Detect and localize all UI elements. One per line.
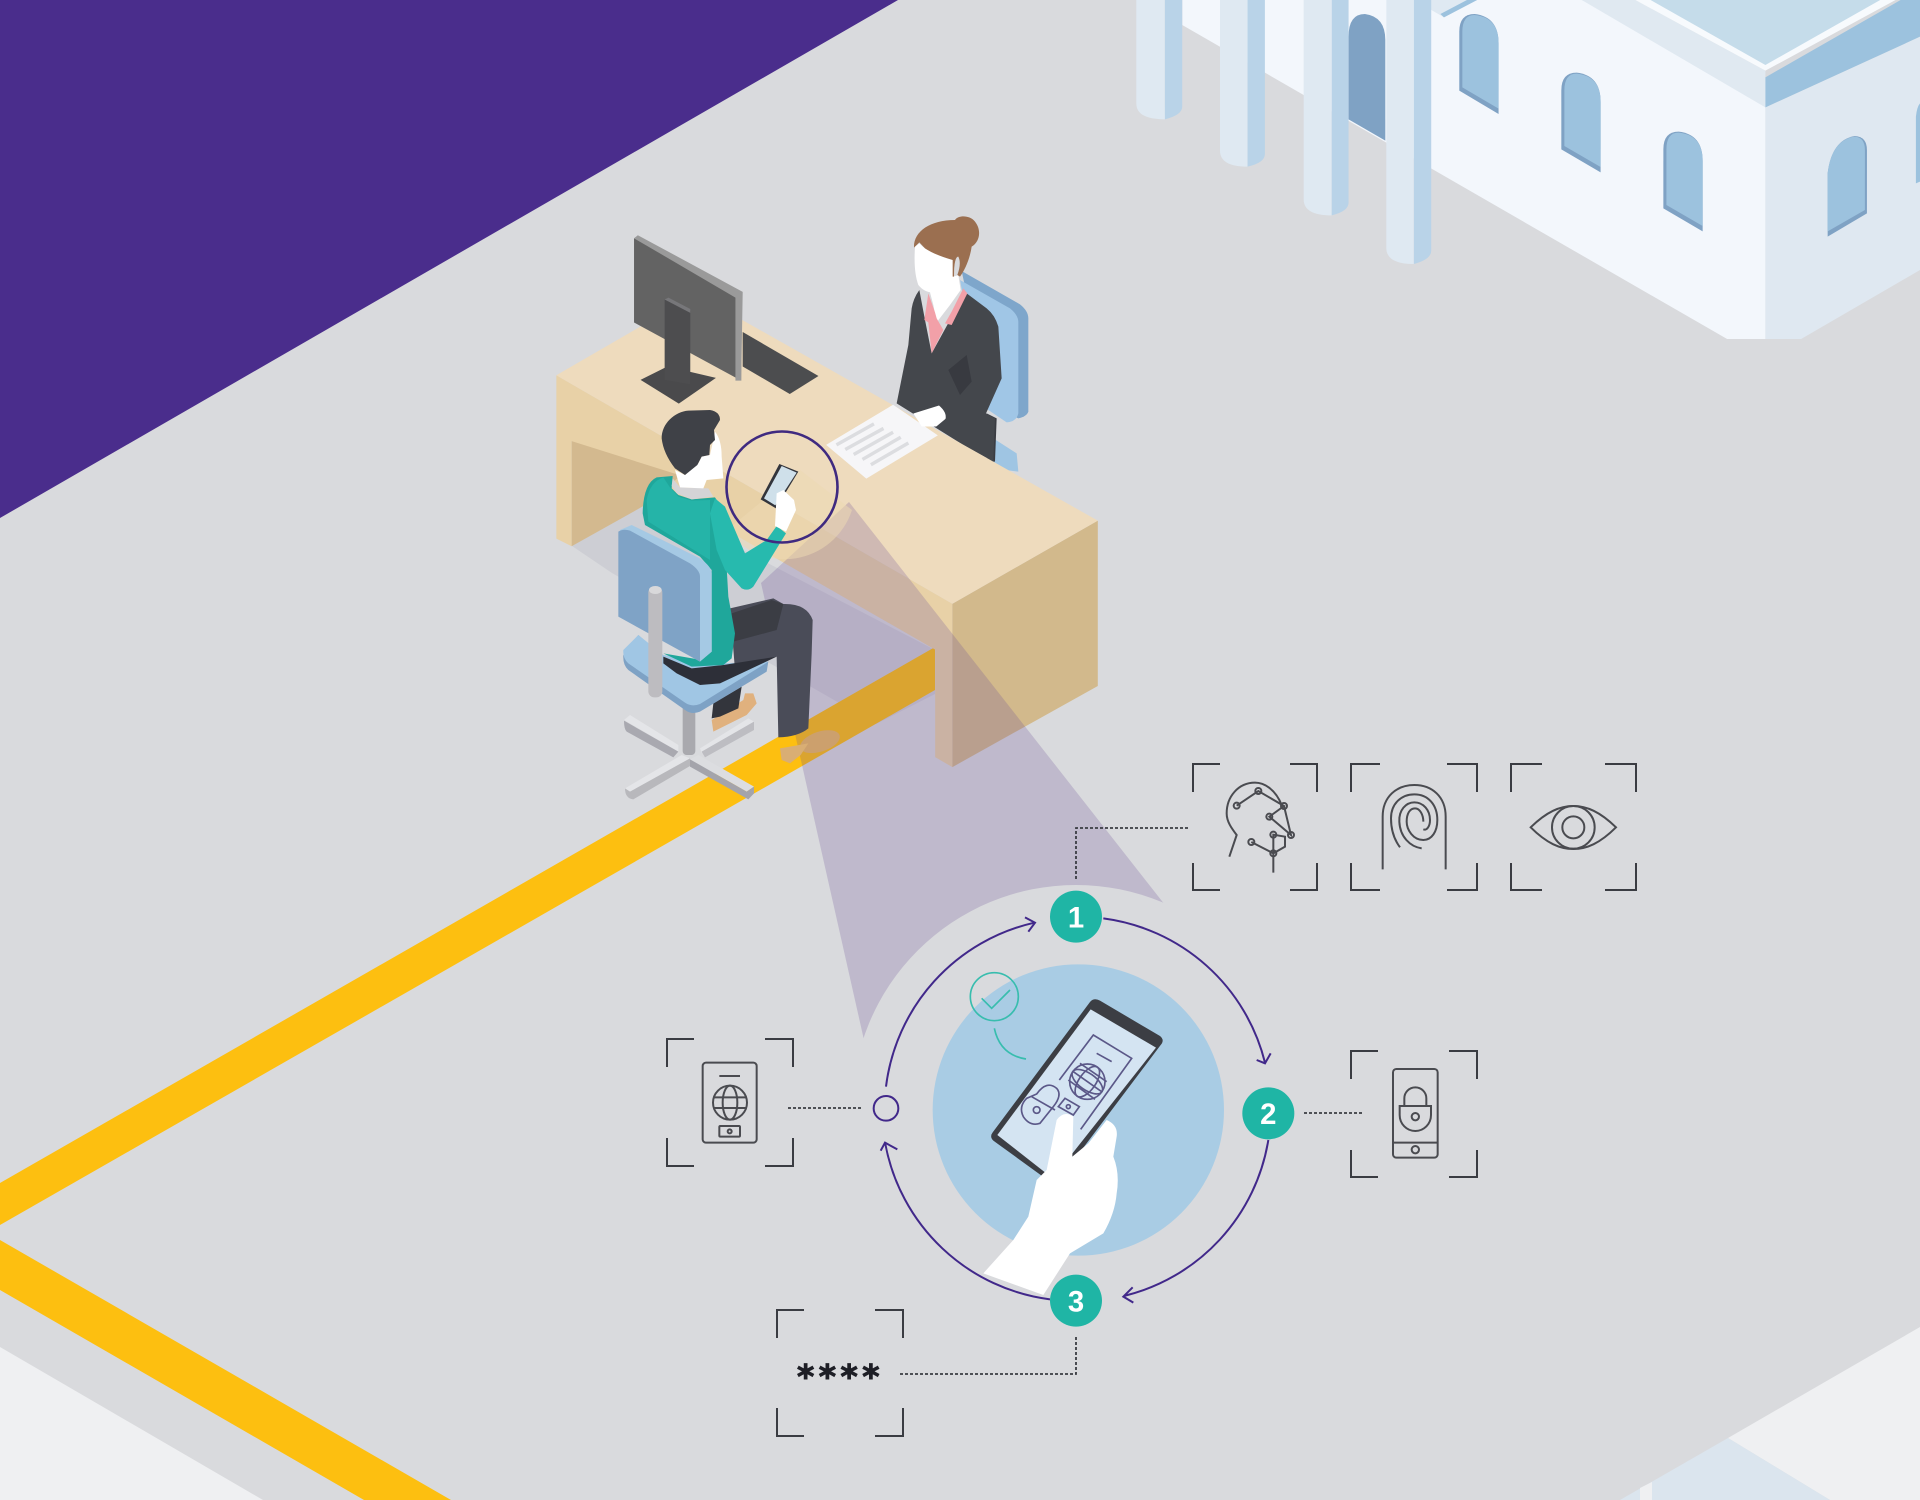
start node [874,1096,898,1121]
light floor bottom right [1620,1327,1920,1500]
trousers [730,598,813,737]
icon: fingerprint [1351,764,1477,890]
reception desk and monitor [556,235,1098,767]
icon: passport document [667,1039,793,1166]
cornice and roof [1426,0,1920,107]
recess under desk [572,441,681,546]
desk top [556,294,1098,604]
blue disc [933,964,1224,1256]
columns [1136,0,1431,264]
icon: face recognition [1193,764,1317,890]
chair base, shoes and lower legs [624,687,843,799]
step 1 badge [1050,891,1102,943]
left leg and front panel [556,375,952,767]
password icon: **** [797,1357,884,1396]
far shoe [712,693,757,732]
chair back [960,271,1028,472]
floor shadow under desk [572,502,935,724]
right wall [1765,37,1920,339]
chair post [648,586,662,697]
pink blouse collar [924,288,967,353]
check mark badge [970,973,1026,1059]
password icon [777,1310,903,1436]
seat of trousers [663,657,777,685]
computer monitor [634,235,743,404]
jumper shoulder highlight [647,477,710,560]
jumper arm [710,498,786,590]
chair backrest [618,525,712,662]
phone in hand [761,464,798,508]
hair [914,216,979,277]
yellow path upper band [0,647,935,1225]
clerk chair and woman [897,216,1028,472]
yellow path lower band [0,1240,451,1500]
face [915,243,955,292]
keyboard [743,332,818,394]
step 2 badge [1242,1087,1294,1139]
hand [775,490,796,532]
light floor bottom left [0,1347,263,1500]
desk [556,294,1098,767]
step 2 badge: 2 [1260,1098,1276,1131]
chair base arms [624,703,754,799]
circular cut-out under process diagram [852,885,1300,1333]
lit glow below phone circle [727,470,852,559]
process diagram: phone verification cycle [874,891,1294,1327]
passport card on screen [1021,1035,1132,1129]
clerk hand on document [913,405,946,427]
near shoe shadow [797,726,843,758]
step 3 badge: 3 [1068,1285,1084,1318]
projection beam [761,502,1165,1040]
seated customer [618,410,813,737]
right side face [952,521,1098,767]
jacket shading [948,355,972,395]
step 3 badge [1050,1275,1102,1327]
neck [930,275,961,322]
purple corner area [0,0,898,518]
thigh shading [732,600,783,642]
near shoe [780,743,808,763]
white hand [983,1114,1118,1295]
arched windows [1459,14,1920,237]
chair seat [623,635,768,713]
icon: locked phone [1351,1051,1477,1177]
dark doorway [1349,14,1385,141]
face and neck [675,432,723,488]
jacket [897,290,1002,462]
cycle arrows [881,917,1271,1303]
dotted connectors [788,828,1362,1374]
icon: eye scan [1511,764,1636,890]
bank building [1136,0,1920,339]
collar [672,478,713,499]
front wall [1182,0,1765,339]
far lower leg [712,687,742,718]
step 1 badge: 1 [1068,901,1084,934]
purple ring around phone [726,432,838,542]
document on desk [826,405,938,479]
jumper body [643,476,735,667]
hair [662,410,720,475]
smartphone [991,999,1163,1185]
